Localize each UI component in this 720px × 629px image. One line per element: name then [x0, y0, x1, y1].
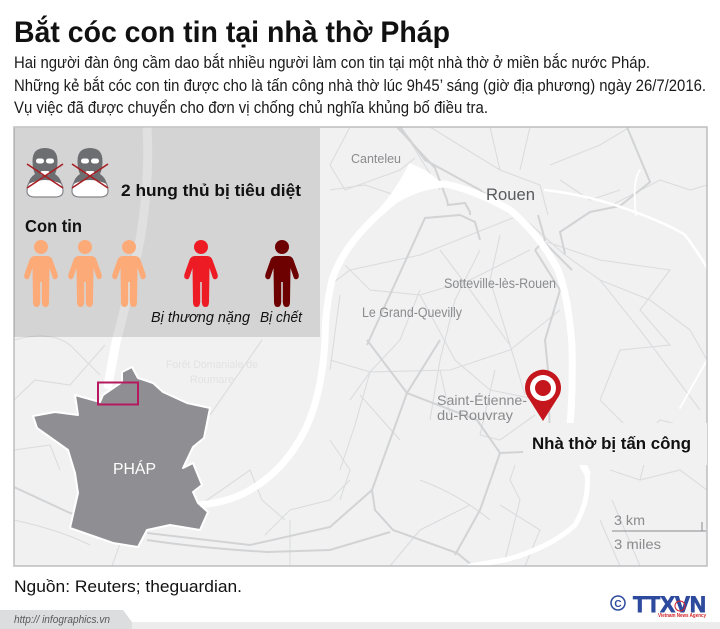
panel: victims overlay	[14, 128, 320, 337]
website: http:// infographics.vn	[14, 614, 110, 626]
map labels	[166, 151, 556, 423]
major roads	[14, 127, 650, 566]
map labels: Forêt Domaniale de	[166, 359, 258, 371]
map labels: Canteleu	[351, 151, 401, 166]
scale bar: 3 km	[614, 513, 645, 528]
map labels: Saint-Étienne-	[437, 392, 527, 408]
locator box	[98, 382, 138, 404]
France inset map	[33, 367, 210, 547]
scale bar	[612, 513, 706, 552]
intro text: Vụ việc đã được chuyển cho đơn vị chống chủ nghĩa khủng bố điều tra.	[14, 99, 488, 117]
icon: masked attackers crossed out	[27, 148, 108, 197]
logo: TTXVN: C	[614, 599, 622, 610]
hostages heading: Con tin	[25, 216, 82, 236]
map labels: Roumare	[190, 374, 234, 386]
map labels: Rouen	[486, 185, 535, 204]
country label: PHÁP	[113, 459, 156, 478]
icon: seriously injured	[184, 240, 218, 307]
attackers caption: 2 hung thủ bị tiêu diệt	[121, 181, 301, 200]
callout: attacked church: Nhà thờ bị tấn công	[532, 434, 691, 453]
Seine river	[108, 127, 707, 566]
map labels: Sotteville-lès-Rouen	[444, 276, 556, 291]
icons: hostages unharmed	[24, 240, 146, 307]
intro text	[14, 53, 706, 117]
icon: dead	[265, 240, 299, 307]
source: Nguồn: Reuters; theguardian.	[14, 577, 242, 596]
map labels: Le Grand-Quevilly	[362, 305, 462, 320]
scale bar: 3 miles	[614, 537, 661, 552]
map roads	[14, 125, 707, 566]
footer band	[0, 610, 720, 629]
intro text: Hai người đàn ông cầm dao bắt nhiều người làm con tin tại một nhà thờ ở miền bắc nước Pháp.	[14, 53, 650, 72]
map panel	[14, 125, 707, 566]
logo: TTXVN: Vietnam News Agency	[658, 613, 706, 619]
logo: TTXVN: TTXVN	[633, 592, 706, 617]
label: seriously injured: Bị thương nặng	[151, 310, 250, 326]
label: dead: Bị chết	[260, 310, 303, 326]
title: Bắt cóc con tin tại nhà thờ Pháp	[14, 15, 450, 49]
icon: location pin	[525, 370, 561, 421]
callout: attacked church	[524, 423, 707, 465]
map labels: du-Rouvray	[437, 407, 513, 423]
